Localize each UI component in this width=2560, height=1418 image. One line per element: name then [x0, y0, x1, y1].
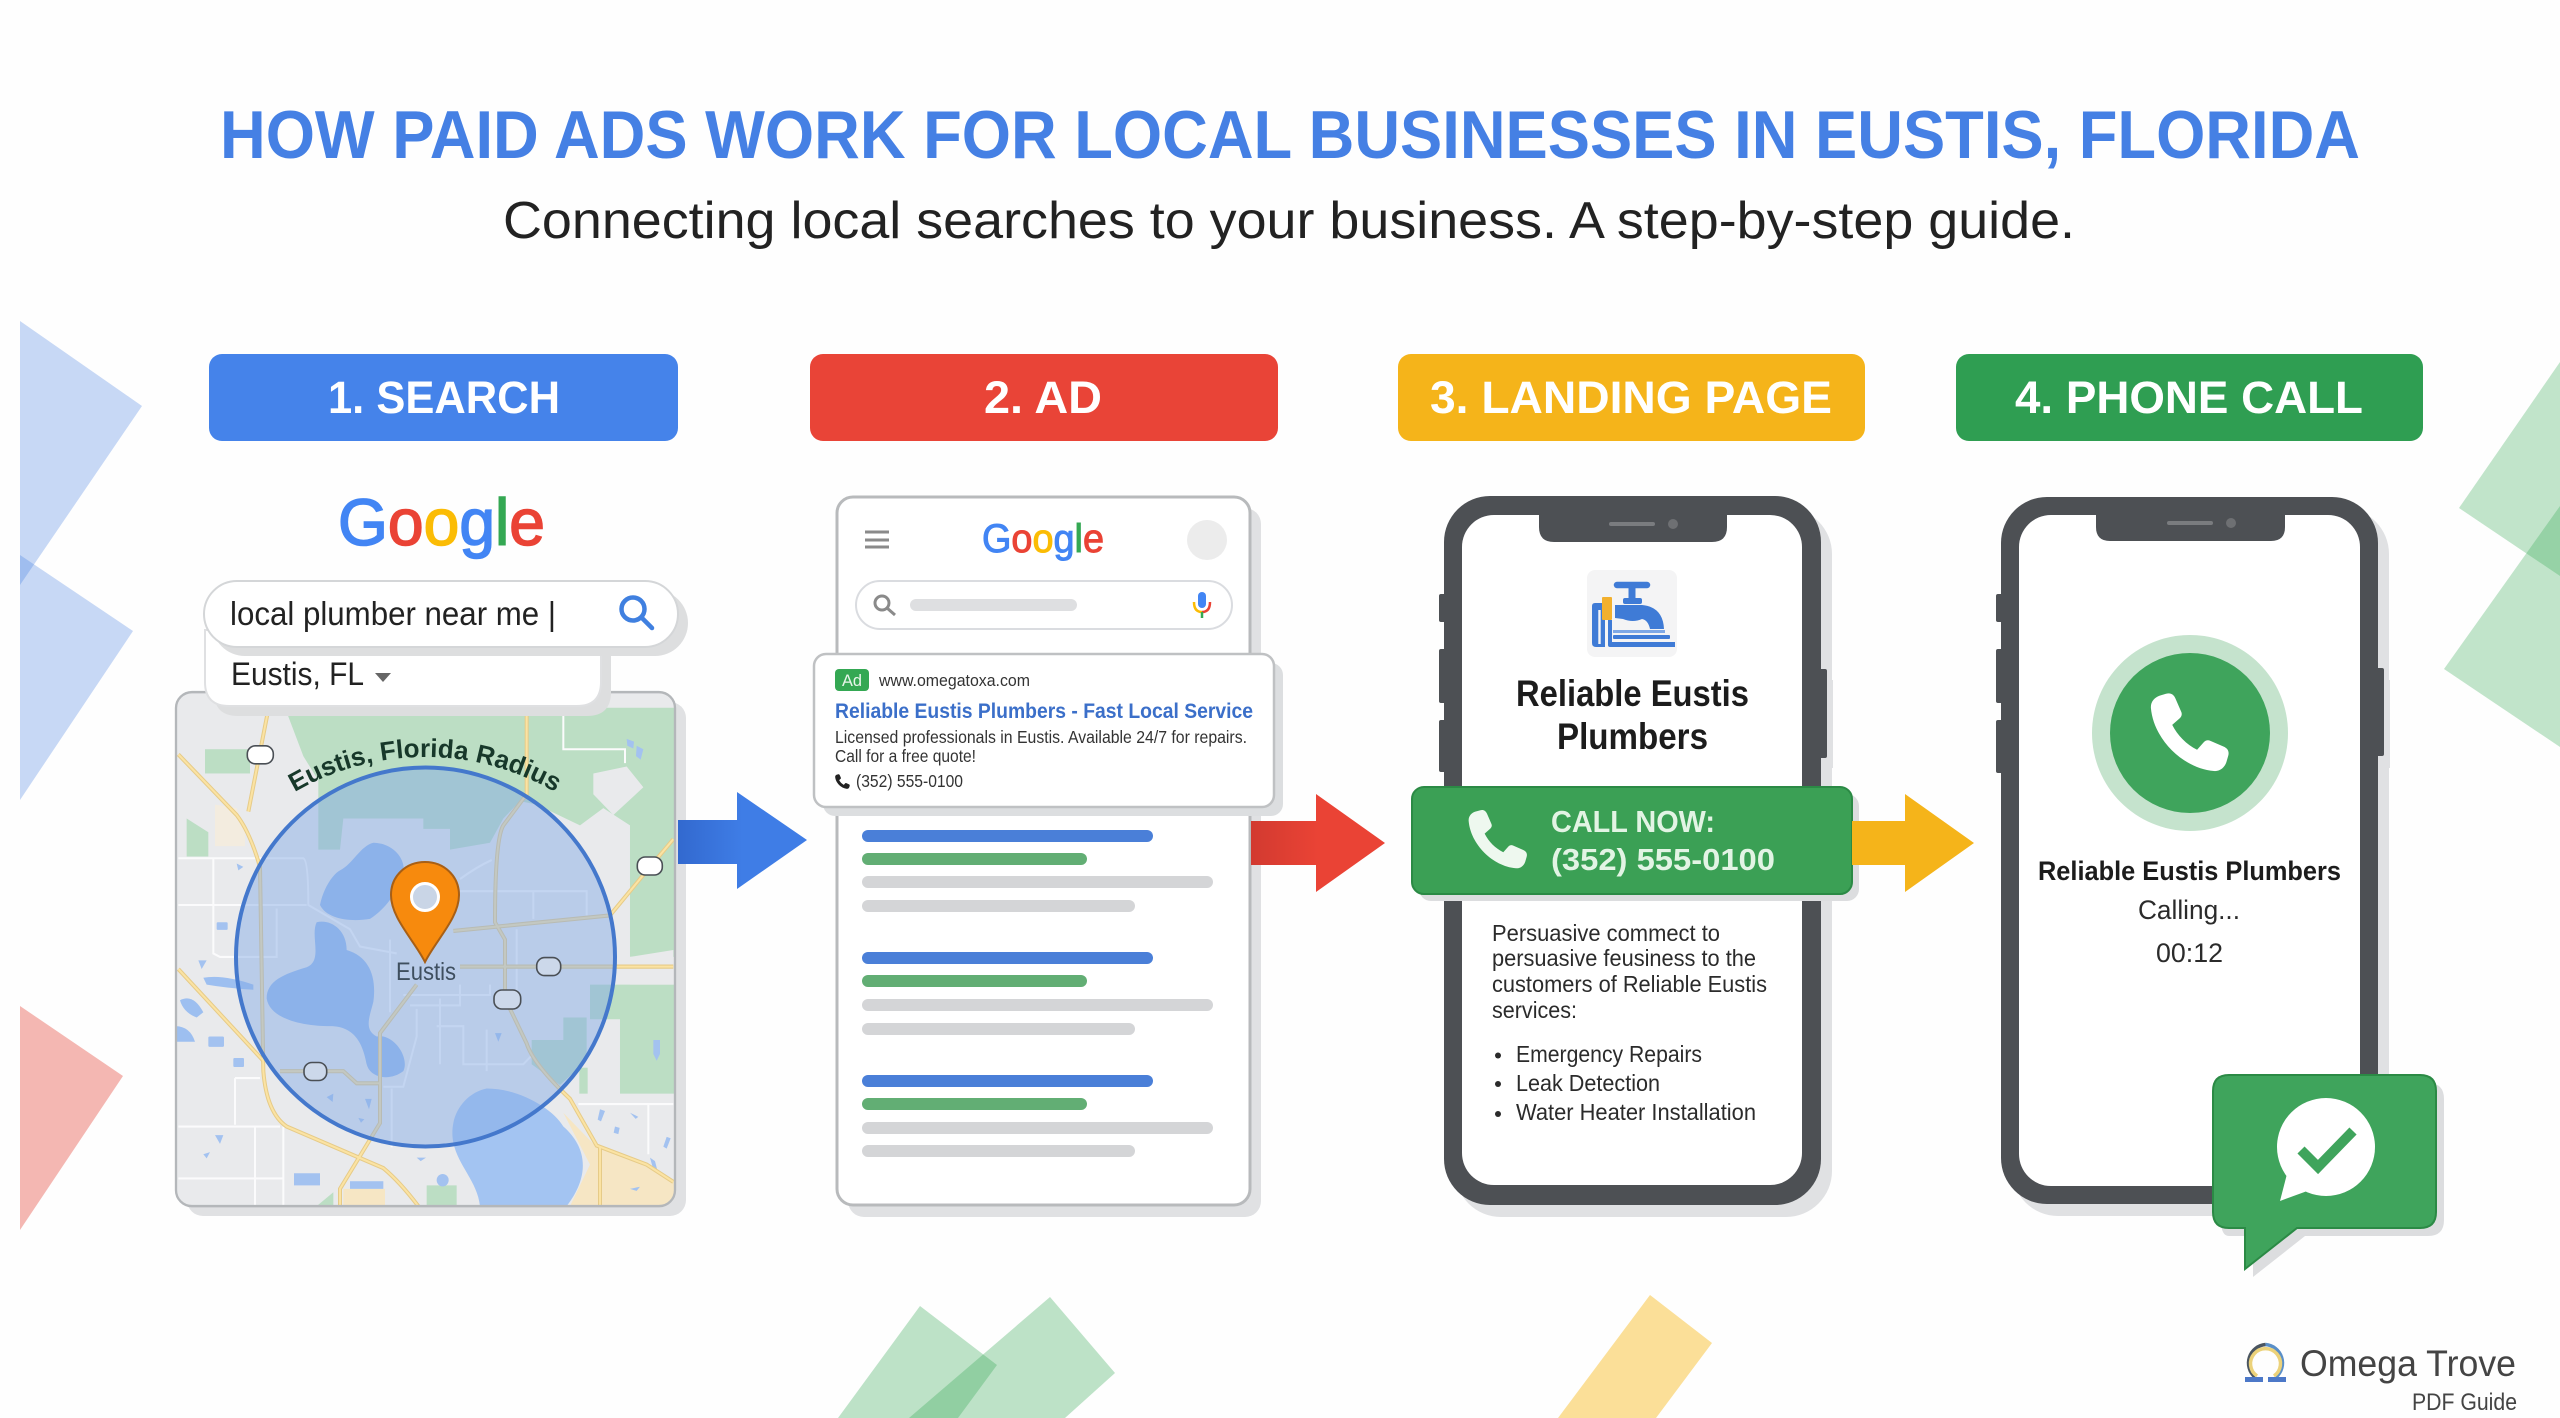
step header: 4. Phone call: 4. PHONE CALL	[2015, 372, 2363, 423]
phone frame	[1996, 497, 2390, 1216]
arrow: search to ad	[678, 792, 807, 889]
Google logo small: Google	[982, 517, 1104, 561]
Google logo: Google	[338, 485, 545, 559]
mobile search bar	[856, 581, 1232, 629]
panel: landing page	[1412, 496, 1859, 1217]
step header: 2. Ad	[810, 354, 1278, 441]
service list	[1495, 1041, 1756, 1125]
icon: faucet	[1587, 570, 1677, 657]
map shields	[247, 746, 662, 1080]
body copy: Persuasive commect to	[1492, 920, 1720, 946]
icon: magnifier	[622, 598, 652, 628]
arrow: landing page to phone call	[1852, 794, 1974, 892]
logo: Omega Trove: PDF Guide	[2412, 1389, 2517, 1416]
logo: Omega Trove	[2245, 1343, 2517, 1416]
phone frame	[1439, 496, 1833, 1217]
search box: local plumber near me |	[230, 595, 556, 632]
ad card	[814, 654, 1283, 816]
map	[174, 690, 686, 1216]
logo: Omega Trove: Omega Trove	[2300, 1343, 2516, 1384]
location dropdown	[205, 630, 611, 716]
step header: 3. Landing page	[1398, 354, 1865, 441]
caller details: Calling...	[2138, 895, 2240, 925]
step header: 3. Landing page: 3. LANDING PAGE	[1430, 372, 1832, 423]
radius label: Eustis, Florida Radius	[288, 738, 560, 792]
ad card: Reliable Eustis Plumbers - Fast Local Service	[835, 700, 1253, 723]
panel: phone call	[1996, 497, 2444, 1277]
body copy: services:	[1492, 997, 1577, 1023]
radius circle	[236, 768, 615, 1146]
location pin	[391, 862, 459, 962]
arrow: ad to landing page	[1251, 794, 1385, 892]
panel: ad	[814, 497, 1283, 1217]
search box	[204, 581, 688, 656]
business name: Reliable Eustis	[1516, 673, 1749, 714]
service list: Water Heater Installation	[1516, 1099, 1756, 1125]
call now banner: CALL NOW:	[1551, 804, 1715, 839]
icon: phone	[1469, 810, 1527, 868]
ad badge	[835, 669, 869, 691]
caller details	[2038, 856, 2341, 968]
caller details: 00:12	[2156, 938, 2223, 968]
ad card: Licensed professionals in Eustis. Available 24/7 for repairs.	[835, 727, 1247, 747]
body copy	[1492, 920, 1767, 1023]
body copy: customers of Reliable Eustis	[1492, 971, 1767, 997]
icon: menu	[865, 532, 889, 547]
body copy: persuasive feusiness to the	[1492, 945, 1756, 971]
ad card: (352) 555-0100	[856, 771, 963, 791]
call now banner	[1412, 787, 1859, 901]
browser card	[837, 497, 1261, 1217]
organic results	[862, 830, 1213, 1157]
caller details: Reliable Eustis Plumbers	[2038, 856, 2341, 886]
step header: 4. Phone call	[1956, 354, 2423, 441]
ad card: Call for a free quote!	[835, 746, 976, 766]
service list: Leak Detection	[1516, 1070, 1660, 1096]
business name	[1516, 673, 1749, 757]
step header: 1. Search	[209, 354, 678, 441]
ad badge: Ad	[842, 671, 862, 690]
title: HOW PAID ADS WORK FOR LOCAL BUSINESSES IN EUSTIS, FLORIDA	[220, 97, 2360, 173]
business name: Plumbers	[1557, 716, 1708, 757]
location dropdown: Eustis, FL	[231, 656, 364, 692]
icon: call button	[2092, 635, 2288, 831]
step header: 2. Ad: 2. AD	[984, 372, 1102, 423]
icon: omega	[2245, 1344, 2286, 1380]
step header: 1. Search: 1. SEARCH	[328, 372, 560, 423]
chat bubble with check	[2213, 1075, 2444, 1277]
call now banner: (352) 555-0100	[1551, 842, 1775, 877]
ad card: www.omegatoxa.com	[878, 671, 1030, 690]
panel: search	[174, 485, 688, 1216]
avatar	[1187, 520, 1227, 560]
map label: Eustis: Eustis	[396, 958, 456, 986]
background decorative shapes	[20, 321, 2560, 1418]
service list: Emergency Repairs	[1516, 1041, 1702, 1067]
subtitle: Connecting local searches to your business. A step-by-step guide.	[503, 192, 2075, 250]
